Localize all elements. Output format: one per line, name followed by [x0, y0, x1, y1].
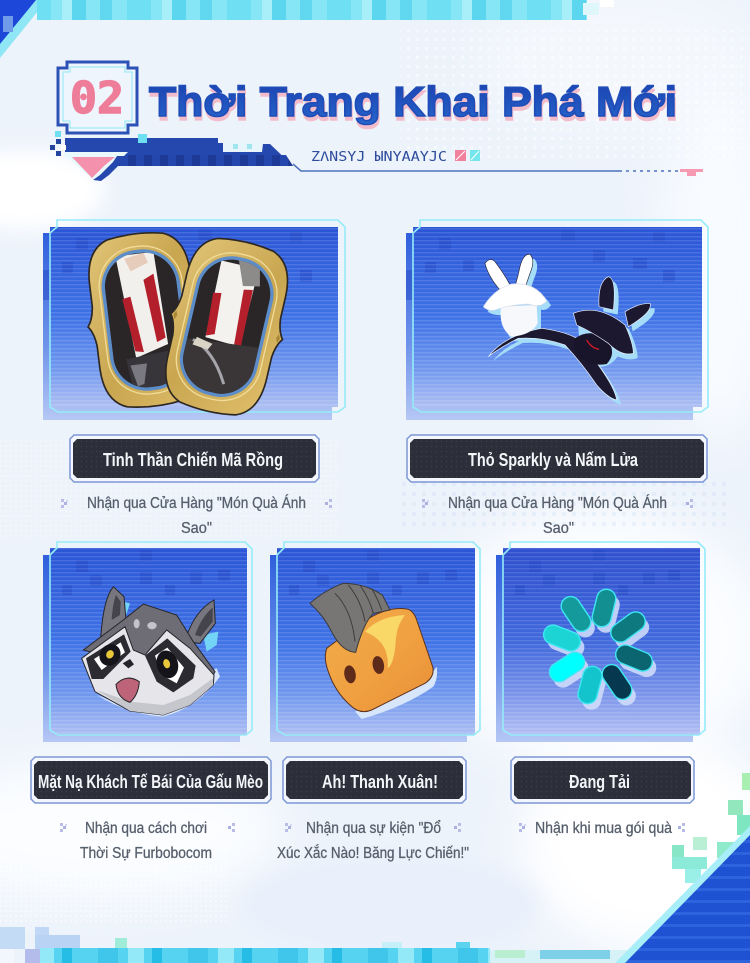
- label: Tinh Thần Chiến Mã Rồng: [70, 435, 319, 482]
- icon: white and black mushroom rabbits: [483, 254, 655, 405]
- text: source of item 1: [61, 493, 332, 537]
- title: Thời Trang Khai Phá Mới: [150, 82, 678, 129]
- text: source of item 1: Nhận qua Cửa Hàng "Món Quà Ánh: [87, 493, 306, 512]
- label: Ah! Thanh Xuân!: [283, 757, 466, 803]
- icon: toast with grey mohawk: [310, 583, 437, 719]
- text: source of item 5: Nhận khi mua gói quà: [535, 820, 672, 837]
- card frame 5: [496, 542, 705, 742]
- text: source of item 3: [60, 820, 235, 862]
- top-left corner accent: [0, 0, 47, 58]
- section number badge: [58, 62, 137, 133]
- header ribbon: [50, 131, 293, 181]
- top pixel strip: [37, 0, 614, 20]
- label: Thỏ Sparkly và Nấm Lửa: [407, 435, 707, 482]
- card frame 2: [406, 220, 708, 420]
- label: Thỏ Sparkly và Nấm Lửa: Thỏ Sparkly và Nấm Lửa: [468, 450, 639, 470]
- label: Đang Tải: [511, 757, 694, 803]
- text: source of item 3: Thời Sự Furbobocom: [80, 845, 212, 862]
- text: source of item 2: Nhận qua Cửa Hàng "Món Quà Ánh: [448, 493, 667, 512]
- card frame 4: [270, 542, 480, 742]
- icon: costume medallions: [87, 232, 288, 416]
- icon: raccoon mask: [82, 587, 220, 717]
- text: source of item 2: Sao": [543, 520, 574, 537]
- title: Thời Trang Khai Phá Mới: [149, 78, 677, 125]
- icon: loading spinner: [541, 587, 659, 712]
- panel: raccoon mask card: [31, 542, 271, 862]
- label: Ah! Thanh Xuân!: Ah! Thanh Xuân!: [322, 772, 438, 792]
- label: Tinh Thần Chiến Mã Rồng: Tinh Thần Chiến Mã Rồng: [103, 450, 283, 470]
- card frame 3: [43, 542, 252, 742]
- text: source of item 4: Xúc Xắc Nào! Băng Lực Chiến!": [277, 843, 469, 862]
- text: source of item 2: [422, 493, 693, 537]
- header rule and marker: [293, 164, 703, 176]
- label: Đang Tải: Đang Tải: [569, 772, 630, 792]
- bottom-right corner accent: [615, 773, 750, 963]
- bottom pixel strip: [0, 927, 630, 963]
- panel: rabbit and mushroom card: [406, 220, 708, 537]
- panel: loading spinner card: [496, 542, 705, 837]
- section number badge: 02: [70, 73, 124, 124]
- cipher subtitle: [311, 150, 480, 165]
- text: source of item 4: Nhận qua sự kiện "Đổ: [306, 819, 441, 837]
- text: source of item 3: Nhận qua cách chơi: [85, 820, 207, 837]
- label: Mặt Nạ Khách Tế Bái Của Gấu Mèo: Mặt Nạ Khách Tế Bái Của Gấu Mèo: [38, 772, 263, 792]
- cipher subtitle: ZΛNSYJ ЫNYAAYJC: [311, 150, 447, 165]
- text: source of item 4: [277, 819, 469, 862]
- card frame 1: [43, 220, 345, 420]
- panel: costume cards: [43, 220, 345, 537]
- label: Mặt Nạ Khách Tế Bái Của Gấu Mèo: [31, 757, 271, 803]
- panel: toast card: [270, 542, 480, 862]
- text: source of item 1: Sao": [181, 520, 212, 537]
